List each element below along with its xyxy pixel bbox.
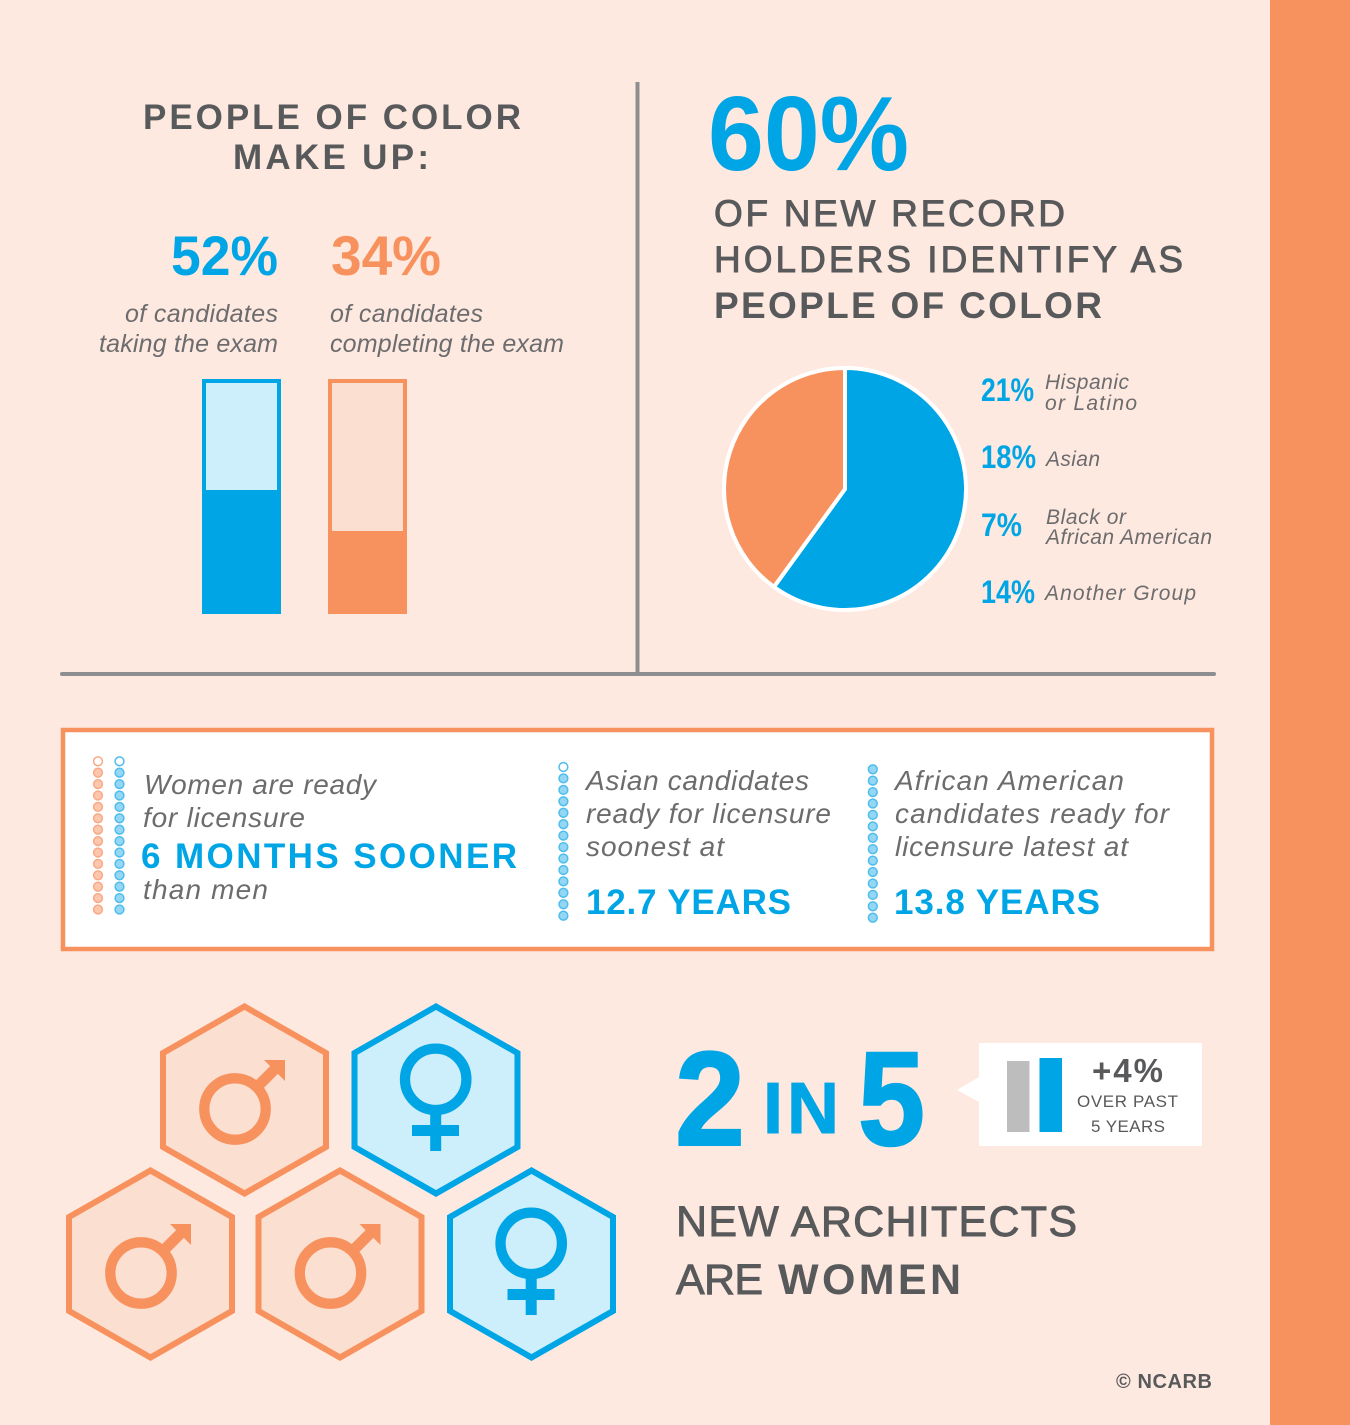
heading: people of color make up: MAKE UP:	[233, 138, 429, 177]
legend: hispanic or latino: or Latino	[1045, 392, 1137, 415]
heading: new architects are women: WOMEN	[778, 1256, 961, 1304]
text: women ready sooner: 6 MONTHS SOONER	[141, 837, 517, 876]
panel: time to licensure	[63, 730, 1212, 949]
callout text: +4%	[1092, 1052, 1163, 1089]
legend: another group	[981, 574, 1196, 610]
text: african american candidates: African American	[893, 765, 1124, 796]
text: women ready sooner: Women are ready	[144, 769, 378, 800]
text: asian candidates: 12.7 YEARS	[586, 883, 791, 922]
big stat: 2 in 5: 2	[675, 1025, 745, 1174]
stat: 52 percent of candidates taking the exam: taking the exam	[99, 330, 278, 358]
callout text: OVER PAST	[1077, 1092, 1178, 1111]
stat: 52 percent of candidates taking the exam	[99, 224, 278, 358]
heading: of new record holders: HOLDERS IDENTIFY AS	[714, 239, 1183, 280]
heading: of new record holders: PEOPLE OF COLOR	[714, 285, 1102, 326]
text: women ready sooner	[141, 769, 517, 905]
legend: black or african american	[981, 506, 1212, 549]
heading: of new record holders: OF NEW RECORD	[714, 193, 1065, 234]
bar: 52 percent	[202, 381, 281, 614]
hexagon: female 1	[354, 1006, 518, 1194]
text: african american candidates: 13.8 YEARS	[894, 883, 1100, 922]
stat: 34 percent of candidates completing the exam: completing the exam	[330, 330, 564, 358]
heading: new architects are women: ARE	[676, 1256, 763, 1304]
hexagon: male 1	[163, 1006, 326, 1194]
legend: another group: Another Group	[1043, 582, 1196, 605]
legend: asian	[981, 439, 1100, 475]
legend: hispanic or latino: Hispanic	[1045, 371, 1130, 394]
heading: new architects are women: NEW ARCHITECTS	[676, 1198, 1077, 1246]
text: asian candidates: soonest at	[586, 831, 725, 862]
stat: 52 percent of candidates taking the exam: of candidates	[125, 300, 278, 328]
credit: NCARB: © NCARB	[1116, 1371, 1212, 1393]
hexagon: male 3	[258, 1170, 422, 1358]
text: african american candidates: candidates ready for	[895, 798, 1171, 829]
callout text: 5 YEARS	[1091, 1117, 1165, 1136]
vertical divider	[636, 82, 640, 674]
dots: women column	[115, 757, 124, 914]
side band	[1270, 0, 1350, 1425]
big stat: 2 in 5	[675, 1025, 925, 1174]
dots: men column	[94, 757, 102, 914]
dots: asian candidates column	[559, 763, 568, 920]
heading: people of color make up: PEOPLE OF COLOR	[143, 98, 521, 137]
dots: african american candidates column	[868, 765, 877, 922]
big stat: 60 percent: 60%	[708, 75, 909, 193]
horizontal divider	[60, 672, 1216, 676]
heading: of new record holders	[714, 193, 1183, 326]
bar: 34 percent	[328, 381, 407, 614]
text: asian candidates	[584, 765, 831, 922]
legend: another group: 14%	[981, 574, 1035, 610]
stat: 34 percent of candidates completing the exam	[330, 224, 564, 358]
callout text	[1077, 1052, 1178, 1136]
heading: people of color make up	[143, 98, 521, 177]
callout: plus 4 percent over past 5 years	[957, 1043, 1202, 1146]
stat: 52 percent of candidates taking the exam: 52%	[171, 224, 278, 287]
text: african american candidates	[893, 765, 1171, 922]
text: african american candidates: licensure latest at	[895, 831, 1129, 862]
stat: 34 percent of candidates completing the exam: of candidates	[330, 300, 483, 328]
legend: asian: Asian	[1044, 448, 1100, 471]
text: women ready sooner: for licensure	[143, 802, 305, 833]
text: asian candidates: ready for licensure	[586, 798, 831, 829]
legend: hispanic or latino	[981, 371, 1137, 415]
legend: asian: 18%	[981, 439, 1036, 475]
icon: comparison bars	[1007, 1058, 1062, 1132]
hexagon: male 2	[69, 1170, 232, 1358]
pie chart	[722, 366, 968, 612]
legend: black or african american: Black or	[1046, 506, 1127, 529]
hexagon: female 2	[450, 1170, 613, 1358]
heading: new architects are women	[676, 1198, 1077, 1304]
big stat: 2 in 5: IN	[763, 1069, 839, 1149]
stat: 34 percent of candidates completing the exam: 34%	[331, 224, 441, 287]
legend: hispanic or latino: 21%	[981, 372, 1034, 408]
big stat: 2 in 5: 5	[858, 1025, 925, 1174]
legend: black or african american: African American	[1044, 526, 1212, 549]
text: women ready sooner: than men	[143, 874, 268, 905]
text: asian candidates: Asian candidates	[584, 765, 809, 796]
legend: black or african american: 7%	[981, 507, 1022, 543]
